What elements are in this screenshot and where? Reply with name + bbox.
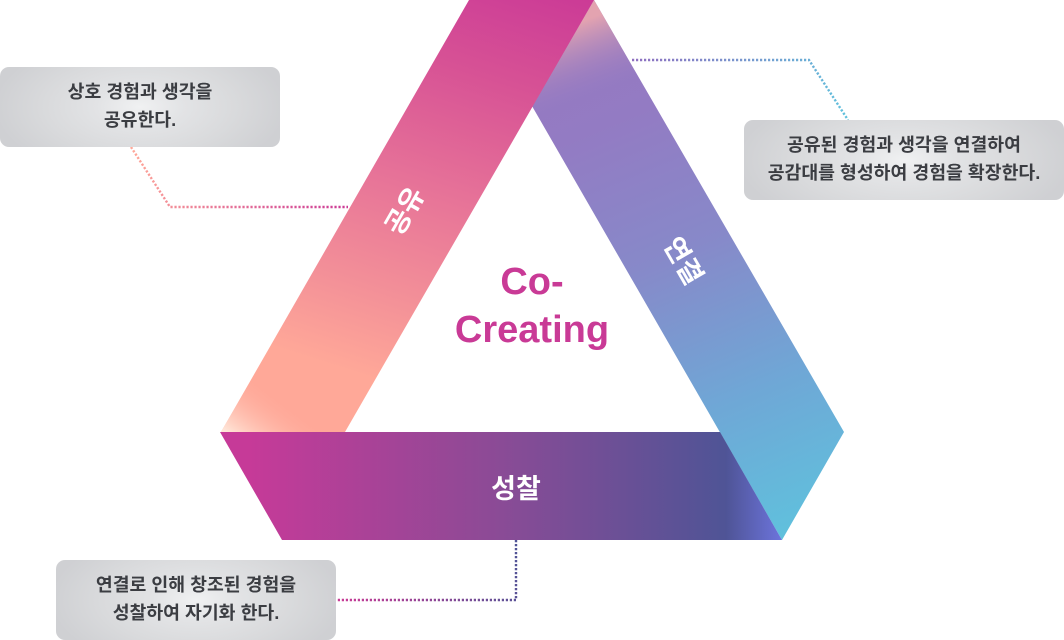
band: reflection (bottom): 성찰 (491, 474, 541, 504)
callout: sharing: 공유한다. (104, 109, 176, 130)
band: sharing (left): 공유 (380, 182, 430, 240)
connector: reflection callout to band (336, 540, 516, 600)
callout: connection: 공유된 경험과 생각을 연결하여 (787, 134, 1021, 155)
callout: reflection (56, 560, 336, 640)
callout: sharing (0, 67, 280, 147)
band: reflection (bottom) (220, 432, 782, 540)
callout: reflection: 성찰하여 자기화 한다. (113, 602, 279, 623)
band: connection (right): 연결 (658, 232, 708, 290)
band: sharing (left) (221, 0, 594, 432)
callout: connection: 공감대를 형성하여 경험을 확장한다. (768, 162, 1040, 183)
connector: sharing callout to band (131, 147, 348, 207)
center title (455, 261, 609, 351)
callout: sharing: 상호 경험과 생각을 (68, 81, 212, 102)
callout: connection (744, 120, 1064, 200)
band: connection (right) (532, 0, 844, 540)
center title: Creating (455, 309, 609, 351)
center title: Co- (500, 261, 564, 303)
connector: connection callout to band (632, 60, 848, 120)
callout: reflection: 연결로 인해 창조된 경험을 (96, 574, 296, 595)
